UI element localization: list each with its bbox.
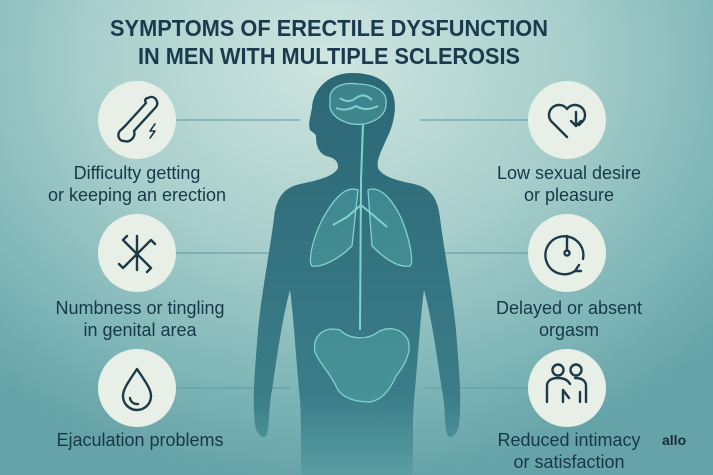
text: difficulty getting erection <box>48 163 226 205</box>
icon: snowflake <box>119 236 155 272</box>
connector lines <box>176 120 529 388</box>
icon: two people <box>552 364 564 376</box>
text: delayed orgasm: Delayed or absent <box>496 298 642 318</box>
icon: bone/lightning <box>118 97 157 141</box>
text: reduced intimacy <box>497 430 641 472</box>
icon: drop <box>123 369 151 410</box>
text: delayed orgasm: orgasm <box>539 320 599 340</box>
text: numbness <box>55 298 225 340</box>
title: IN MEN WITH MULTIPLE SCLEROSIS <box>138 43 520 69</box>
text: numbness: in genital area <box>83 320 197 340</box>
text: low desire <box>497 163 641 205</box>
text: reduced intimacy: Reduced intimacy <box>497 430 641 450</box>
text: delayed orgasm <box>496 298 642 340</box>
icon: clock <box>545 236 583 274</box>
title: SYMPTOMS OF ERECTILE DYSFUNCTION <box>110 15 548 41</box>
text: numbness: Numbness or tingling <box>55 298 225 318</box>
title <box>110 15 548 69</box>
text: low desire: Low sexual desire <box>497 163 641 183</box>
text: ejaculation: Ejaculation problems <box>56 430 224 450</box>
logo: allo: allo <box>662 432 686 448</box>
text: difficulty getting erection: or keeping an erection <box>48 185 226 205</box>
icon: heart <box>549 105 585 137</box>
text: low desire: or pleasure <box>524 185 614 205</box>
text: difficulty getting erection: Difficulty getting <box>74 163 200 183</box>
text: reduced intimacy: or satisfaction <box>513 452 625 472</box>
